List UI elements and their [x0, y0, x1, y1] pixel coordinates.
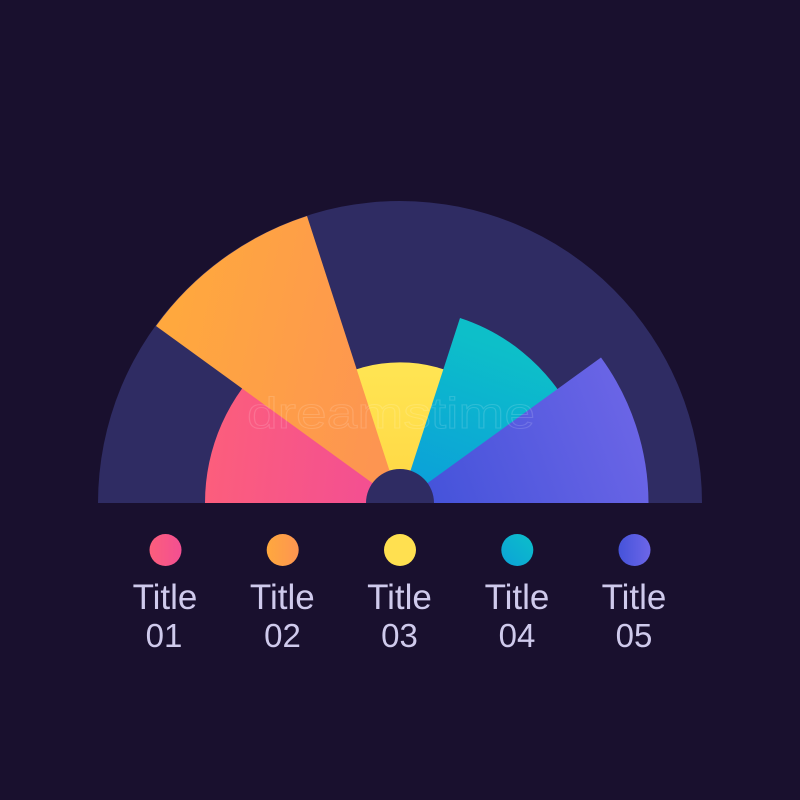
segment 05: purple	[400, 358, 648, 503]
legend	[133, 534, 666, 654]
label 02: Title	[250, 578, 315, 617]
center hub	[366, 469, 434, 503]
segment 01: pink	[205, 358, 400, 503]
legend item 03	[367, 534, 432, 654]
legend item 04	[485, 534, 549, 654]
dot 01	[150, 534, 182, 566]
chart track	[98, 201, 702, 503]
legend item 05	[602, 534, 666, 654]
watermark: dreamstime	[247, 389, 535, 438]
semicircle chart	[98, 201, 702, 503]
label 04: 04	[499, 617, 535, 654]
legend item 02	[250, 534, 315, 654]
label 03: 03	[381, 617, 418, 654]
dot 02	[267, 534, 299, 566]
label 01: Title	[133, 578, 197, 617]
dot 03	[384, 534, 416, 566]
label 04: Title	[485, 578, 549, 617]
label 05: 05	[616, 617, 652, 654]
label 03: Title	[367, 578, 432, 617]
dot 04	[501, 534, 533, 566]
label 01: 01	[146, 617, 182, 654]
label 02: 02	[264, 617, 301, 654]
segment 03: yellow	[330, 362, 470, 503]
dot 05	[618, 534, 650, 566]
segment 04: teal	[400, 318, 568, 503]
segment 02: orange	[156, 216, 400, 503]
legend item 01	[133, 534, 197, 654]
label 05: Title	[602, 578, 666, 617]
